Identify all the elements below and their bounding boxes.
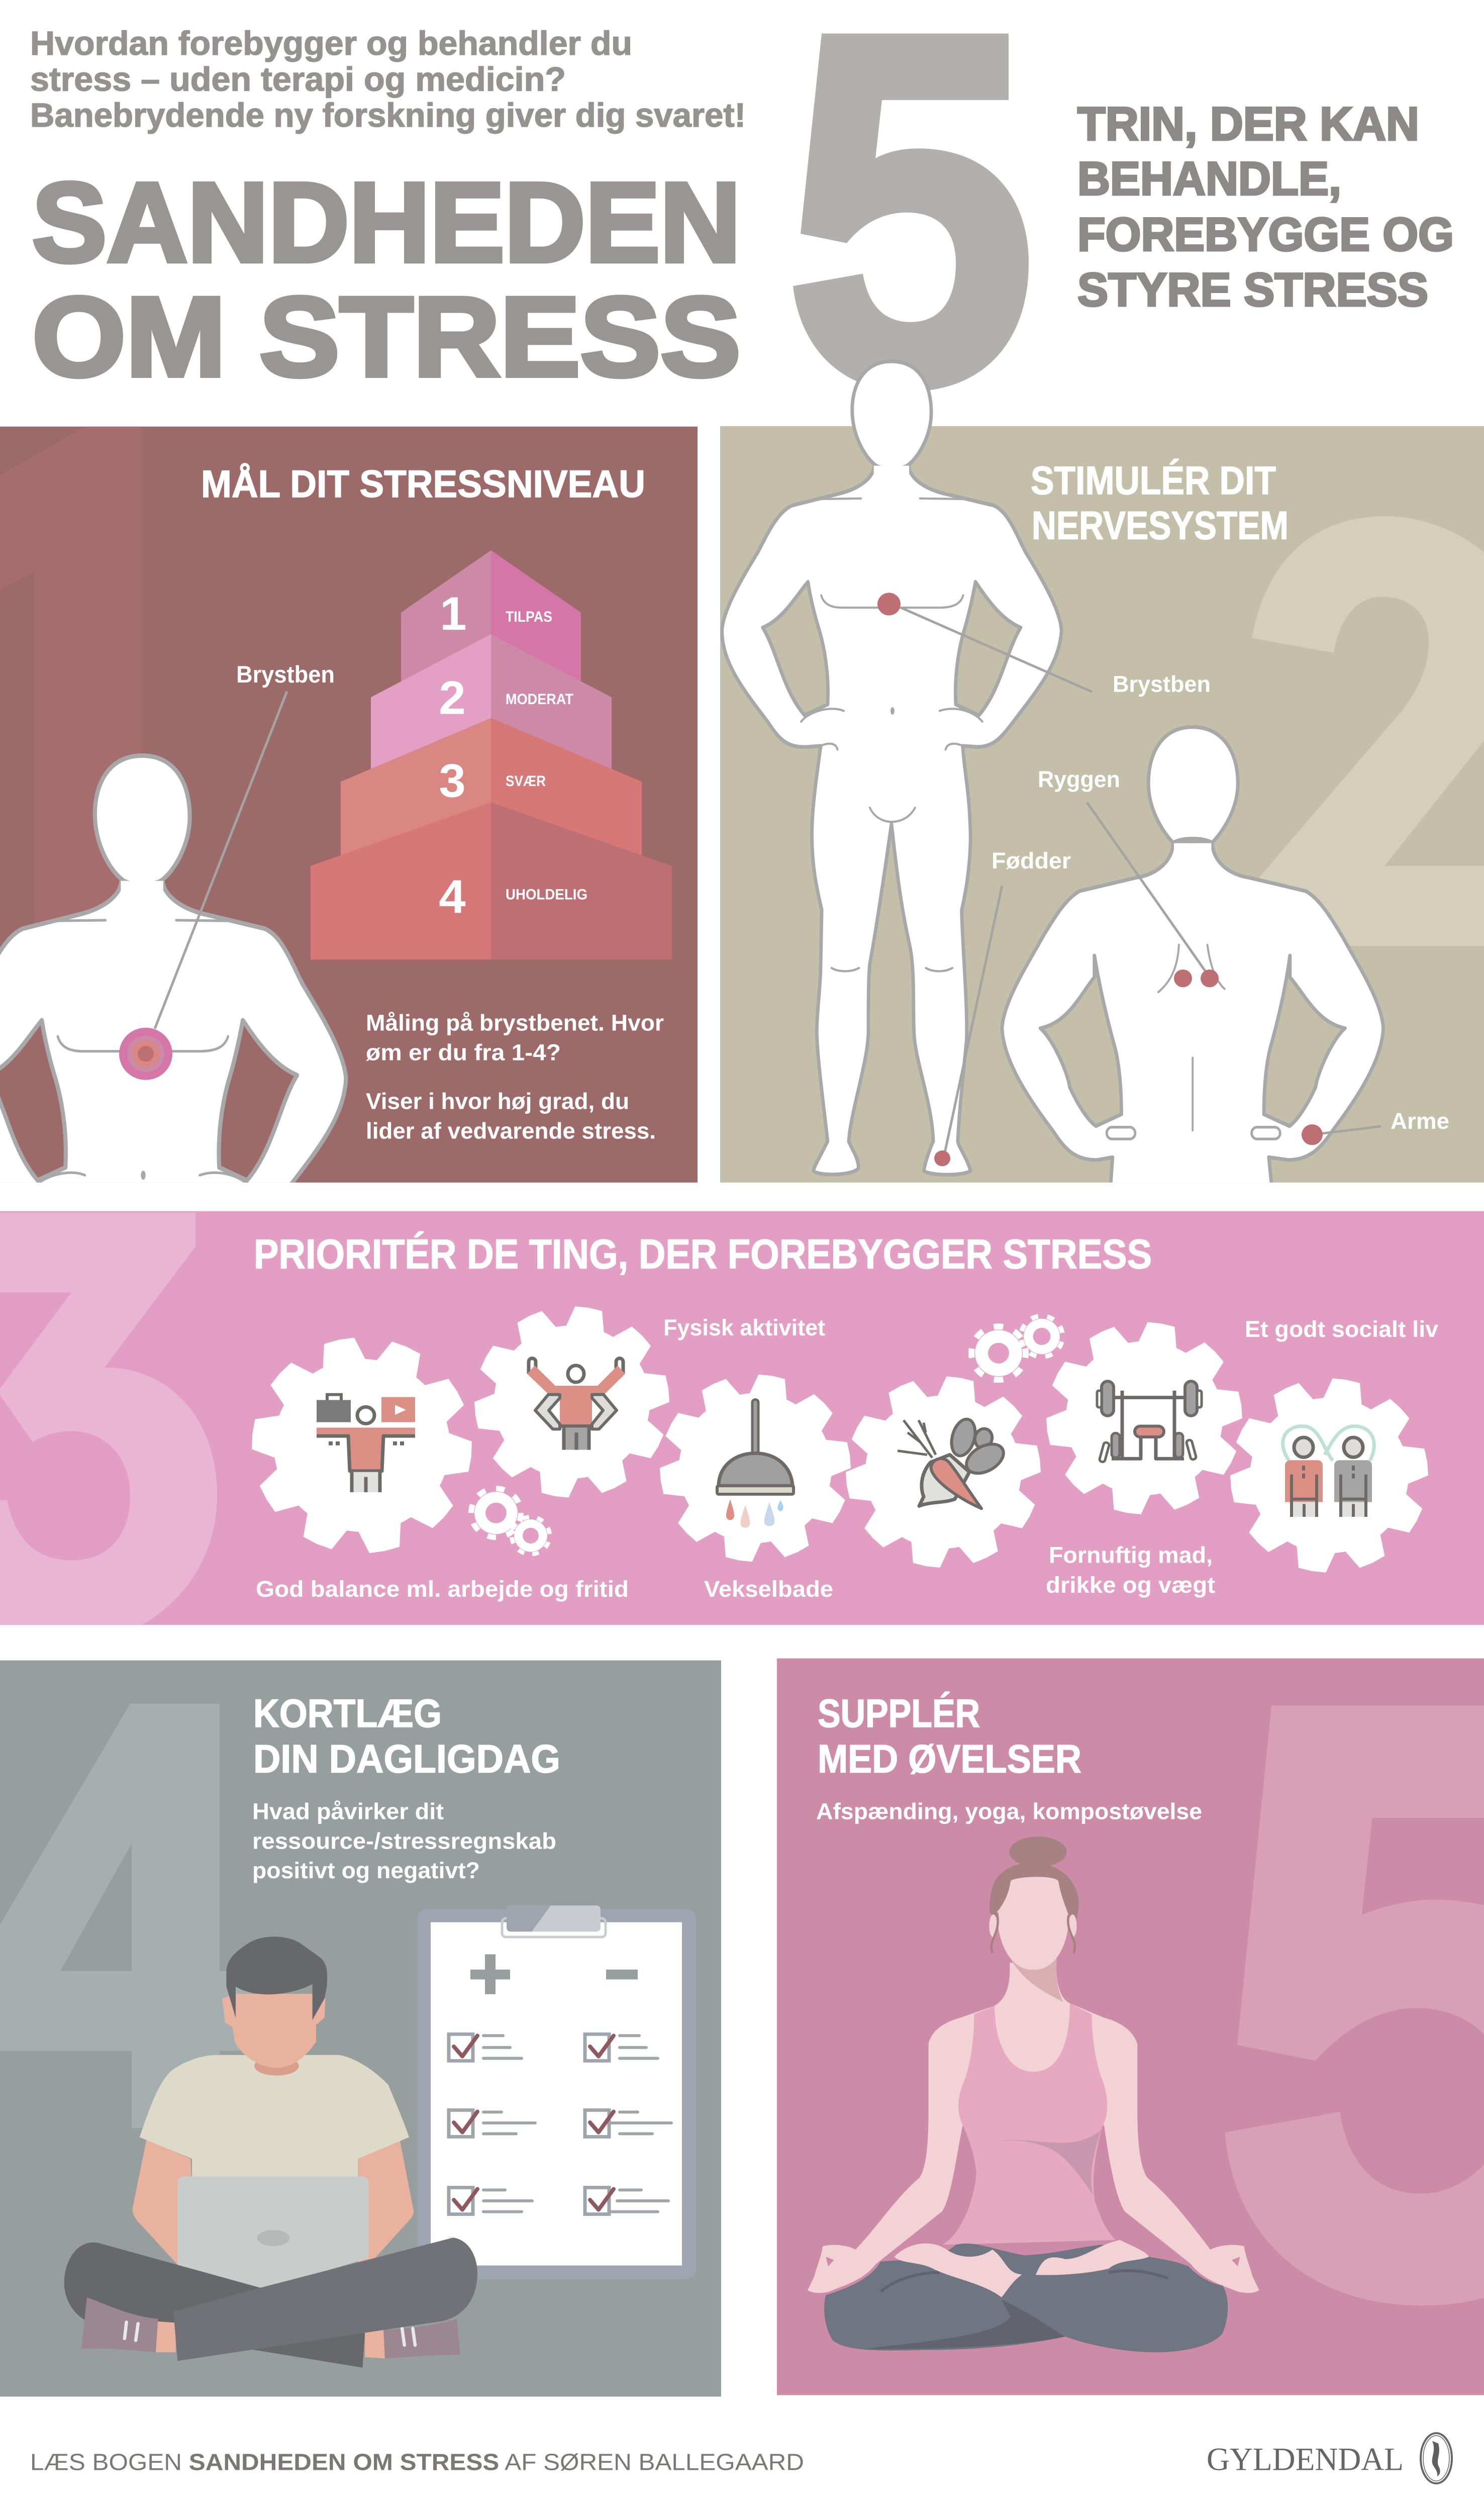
measurement text [366,1010,664,1143]
front body figure [722,361,1061,1175]
captions: Vekselbade [704,1576,833,1602]
callout label: Brystben: Brystben [236,661,335,688]
body figure with chest [0,753,348,1183]
footer text: LÆS BOGEN SANDHEDEN OM STRESS AF SØREN BALLEGAARD [30,2449,804,2475]
panel 1: mål dit stressniveau [0,426,698,1183]
stress pyramid: 4 [439,871,466,923]
small gears left [471,1489,555,1560]
gear: balance [230,1317,494,1574]
stress pyramid: 1 [440,588,467,640]
captions [256,1315,1439,1602]
woman meditating [808,1837,1259,2352]
stress pyramid: SVÆR [506,773,546,790]
subtitle: FOREBYGGE OG [1077,208,1454,261]
measurement text: Måling på brystbenet. Hvor [366,1010,664,1036]
clipboard [418,1905,696,2279]
heading: PRIORITÉR DE TING, DER FOREBYGGER STRESS [254,1231,1152,1277]
intro text [30,25,746,134]
publisher logo: GYLDENDAL [1207,2442,1404,2477]
heading [818,1691,1081,1781]
right checklist [585,2034,671,2214]
left checklist [449,2034,535,2214]
intro text: Hvordan forebygger og behandler du [30,25,632,62]
heading: SUPPLÉR [818,1691,980,1735]
big number 5 [793,34,1029,392]
measurement text: Viser i hvor høj grad, du [366,1089,629,1114]
back body figure [1002,727,1383,1206]
main title [32,160,741,400]
background number 4 [0,1704,251,2128]
subtitle: STYRE STRESS [1077,263,1428,316]
icon: shower head and drops [717,1400,794,1528]
measurement text: lider af vedvarende stress. [366,1118,656,1143]
stress pyramid [311,550,672,959]
panel 3: prioritér de ting [0,1211,1484,1625]
heading: MED ØVELSER [818,1736,1081,1781]
captions: Fysisk aktivitet [663,1315,825,1340]
subtext: Afspænding, yoga, kompostøvelse [816,1799,1202,1824]
panel 5: supplér med øvelser [777,1659,1484,2395]
subtitle [1077,98,1454,316]
callout lines [901,608,1381,1157]
main title: SANDHEDEN [32,160,741,286]
stress pyramid: TILPAS [506,609,552,625]
icon: two people [1283,1426,1374,1517]
sternum target [119,1028,172,1080]
captions: God balance ml. arbejde og fritid [256,1576,629,1602]
main title: OM STRESS [32,274,741,400]
panel 2: stimulér dit nervesystem [720,361,1484,1206]
heading: DIN DAGLIGDAG [253,1736,560,1781]
panel 4: kortlæg din dagligdag [0,1661,721,2396]
gear: food [829,1361,1057,1583]
stress pyramid: MODERAT [506,691,573,708]
icon: beet and carrot [898,1416,1009,1508]
measurement text: øm er du fra 1-4? [366,1040,561,1065]
icon: stork emblem [1421,2433,1452,2483]
subtitle: TRIN, DER KAN [1077,98,1419,150]
small gears right [967,1311,1067,1384]
icon: weight bench [1097,1381,1202,1463]
subtitle: BEHANDLE, [1077,152,1341,205]
icon: work life balance [317,1395,415,1492]
point labels: Arme [1391,1108,1449,1134]
intro text: Banebrydende ny forskning giver dig svaret! [30,97,746,134]
heading: NERVESYSTEM [1032,503,1289,547]
stress pyramid: 3 [439,754,466,807]
callout line: Brystben [155,692,287,1029]
icon: person with raised arms [527,1359,625,1450]
heading [253,1691,560,1781]
stress pyramid: UHOLDELIG [506,887,587,903]
gear: gym [1030,1307,1259,1530]
point labels [992,671,1449,1134]
intro text: stress – uden terapi og medicin? [30,61,566,98]
question text: ressource-/stressregnskab [252,1828,556,1854]
background number 1 [0,427,141,927]
heading: KORTLÆG [253,1691,442,1735]
captions: Fornuftig mad, [1049,1542,1213,1568]
captions: Et godt socialt liv [1245,1316,1439,1342]
heading: STIMULÉR DIT [1031,458,1276,503]
captions: drikke og vægt [1046,1573,1215,1598]
question text: Hvad påvirker dit [252,1799,444,1824]
point labels: Fødder [992,848,1071,874]
gear: social life [1213,1363,1445,1588]
man with laptop [64,1937,477,2368]
pressure points [877,593,1323,1166]
background number 2 [1252,516,1484,946]
gear: shower [643,1360,867,1577]
header [30,25,1454,400]
question text: positivt og negativt? [252,1858,480,1883]
point labels: Brystben [1113,671,1211,697]
background number 3 [0,1213,217,1625]
question text [252,1799,556,1883]
gear: physical activity [458,1291,686,1513]
plus and minus signs [470,1954,638,1994]
heading: MÅL DIT STRESSNIVEAU [201,463,645,506]
heading [1031,458,1289,547]
point labels: Ryggen [1038,766,1120,792]
background number 5 [1225,1705,1484,2305]
publisher logo [1207,2433,1452,2483]
stress pyramid: 2 [439,672,466,725]
